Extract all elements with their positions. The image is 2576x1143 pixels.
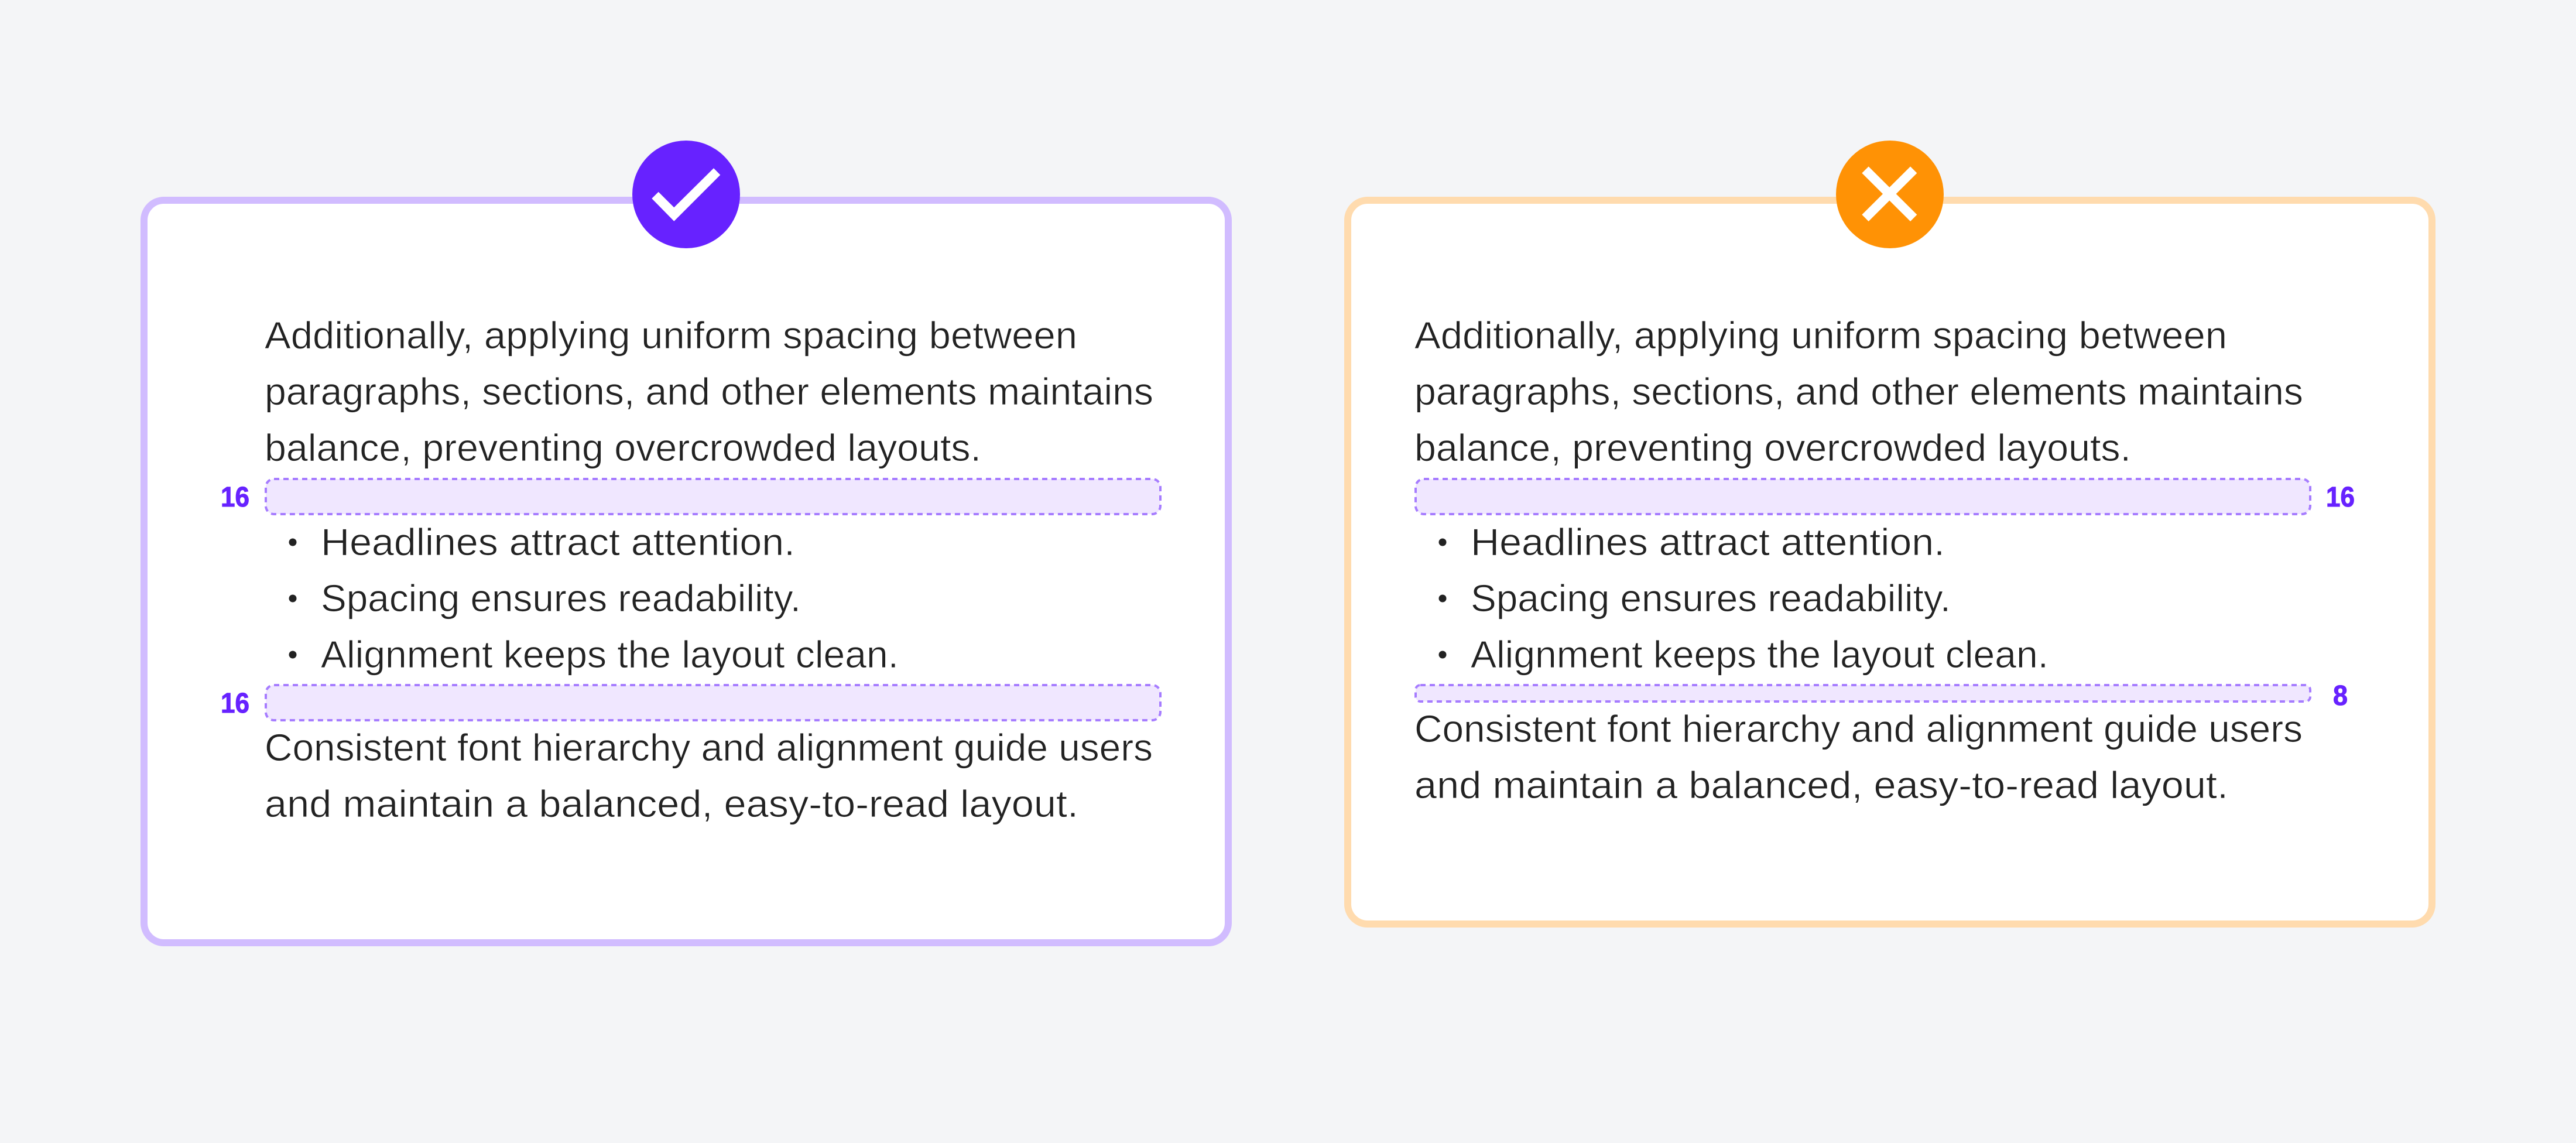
text block: closing paragraph <box>1414 707 2303 806</box>
text block: closing paragraph <box>265 726 1153 825</box>
text block: closing paragraph: and maintain a balanced, easy-to-read layout. <box>265 782 1078 825</box>
text block: closing paragraph: and maintain a balanced, easy-to-read layout. <box>1414 764 2228 806</box>
text block: closing paragraph: Consistent font hierarchy and alignment guide users <box>1414 707 2303 750</box>
panel: incorrect example <box>1348 141 2432 924</box>
bullet list: Alignment keeps the layout clean. <box>1471 633 2049 676</box>
spacing marker: 16 above list: 16 <box>2326 482 2355 513</box>
text block: first paragraph: Additionally, applying uniform spacing between <box>1414 314 2227 357</box>
text block: first paragraph <box>1414 314 2303 469</box>
icon: cross badge <box>1836 141 1944 248</box>
bullet list <box>1439 521 2049 676</box>
spacing marker: 16 above list <box>221 479 1160 514</box>
bullet list <box>289 521 899 676</box>
bullet list: Headlines attract attention. <box>1471 521 1945 563</box>
text block: first paragraph: balance, preventing overcrowded layouts. <box>1414 426 2131 469</box>
text block: first paragraph: paragraphs, sections, and other elements maintains <box>265 370 1153 413</box>
bullet list: Spacing ensures readability. <box>1471 577 1951 620</box>
bullet list: Spacing ensures readability. <box>321 577 801 620</box>
text block: closing paragraph: Consistent font hierarchy and alignment guide users <box>265 726 1153 769</box>
text block: first paragraph: Additionally, applying uniform spacing between <box>265 314 1077 357</box>
spacing marker: 16 above list: 16 <box>221 482 249 513</box>
bullet list: Headlines attract attention. <box>321 521 795 563</box>
panel: correct example <box>144 141 1228 943</box>
card: correct <box>144 200 1228 943</box>
spacing marker: 8 below list <box>1416 680 2348 711</box>
card: incorrect <box>1348 200 2432 924</box>
spacing marker: 16 above list <box>1416 479 2355 514</box>
spacing marker: 16 below list: 16 <box>221 688 249 719</box>
text block: first paragraph <box>265 314 1153 469</box>
text block: first paragraph: paragraphs, sections, and other elements maintains <box>1414 370 2303 413</box>
text block: first paragraph: balance, preventing overcrowded layouts. <box>265 426 981 469</box>
spacing marker: 8 below list: 8 <box>2333 680 2348 711</box>
spacing marker: 16 below list <box>221 685 1160 720</box>
bullet list: Alignment keeps the layout clean. <box>321 633 899 676</box>
icon: check badge <box>632 141 740 248</box>
